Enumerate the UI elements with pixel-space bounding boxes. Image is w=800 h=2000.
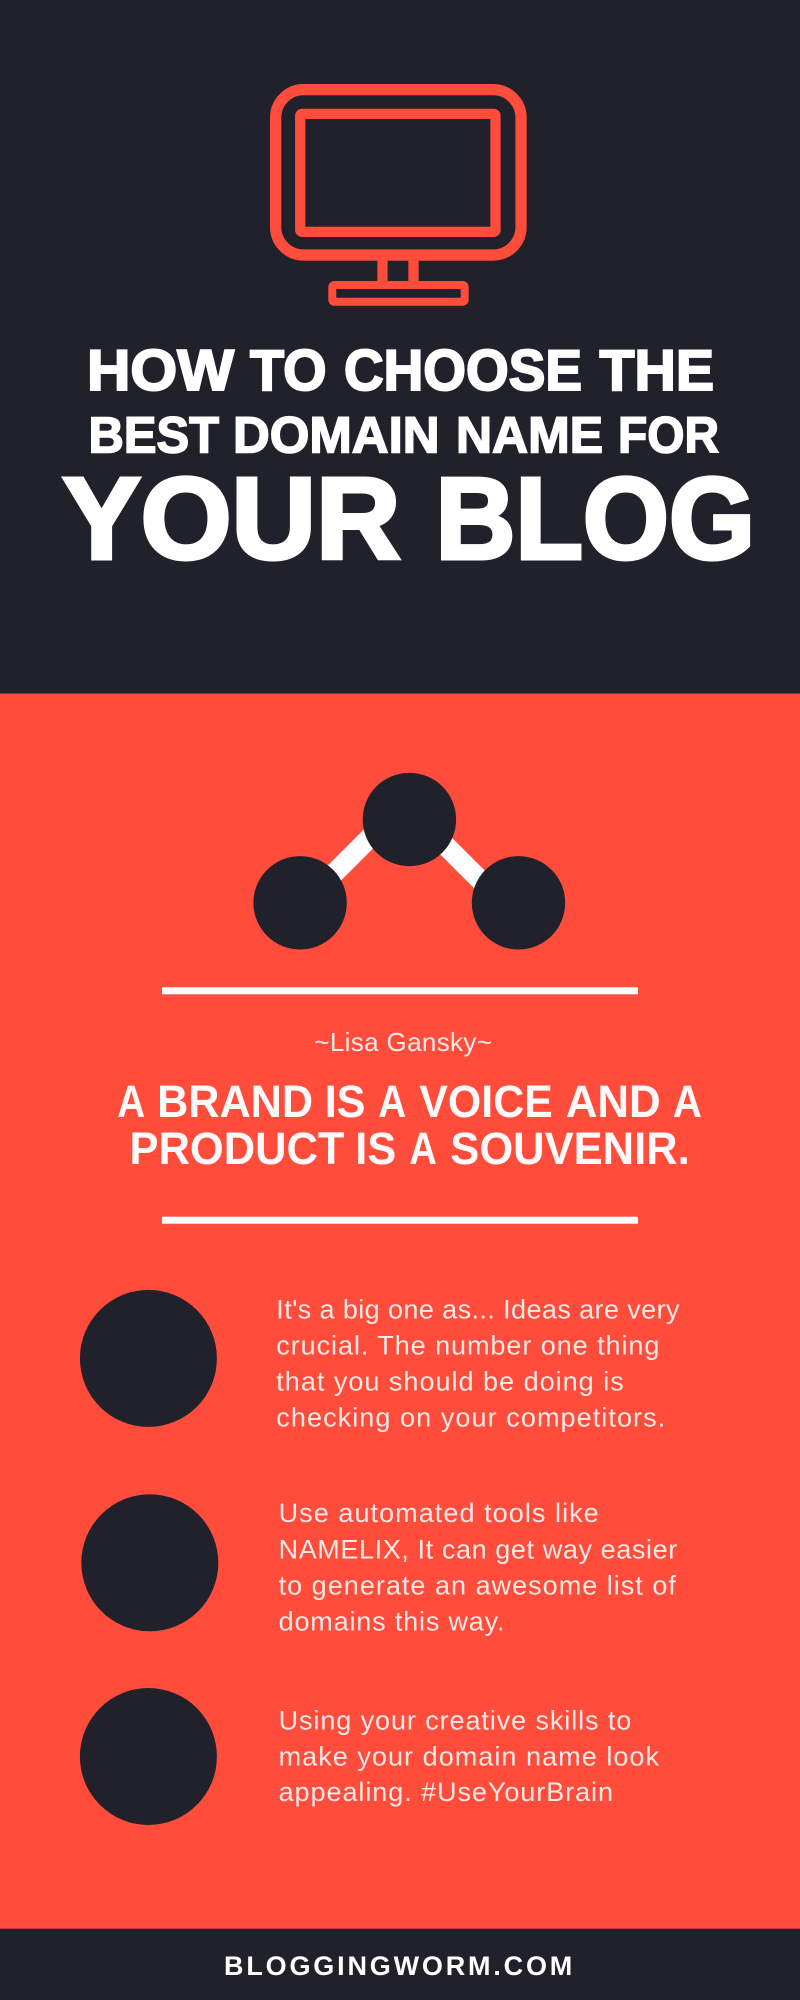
bullet circle 3 bbox=[80, 1688, 217, 1825]
quote line 1 bbox=[117, 1076, 702, 1127]
title line 1: TO bbox=[250, 339, 326, 403]
quote line 2: A bbox=[409, 1123, 437, 1174]
quote heading bbox=[117, 1076, 702, 1174]
bullet circle 2 bbox=[81, 1494, 218, 1631]
quote line 2: IS bbox=[355, 1123, 396, 1174]
item 1 text bbox=[276, 1294, 680, 1432]
panel: main red background bbox=[0, 694, 800, 1929]
quote attribution: ~Lisa Gansky~ bbox=[314, 1027, 492, 1057]
title line 1: HOW bbox=[87, 339, 235, 403]
title line 2 bbox=[88, 406, 719, 464]
title bbox=[63, 339, 755, 584]
panel: header background bbox=[0, 0, 800, 694]
list item 1 bbox=[80, 1290, 680, 1432]
item 2 text: domains this way. bbox=[279, 1606, 504, 1636]
quote line 1: AND bbox=[566, 1076, 661, 1127]
item 2 text: to generate an awesome list of bbox=[279, 1570, 676, 1600]
title line 1: CHOOSE bbox=[344, 339, 582, 403]
item 2 text: NAMELIX, It can get way easier bbox=[279, 1535, 677, 1565]
quote line 1: VOICE bbox=[419, 1076, 553, 1127]
bottom divider bbox=[162, 1217, 638, 1224]
item 3 text bbox=[279, 1706, 660, 1807]
quote line 1: A bbox=[378, 1076, 406, 1127]
quote line 2: PRODUCT bbox=[130, 1123, 344, 1174]
item 3 text: make your domain name look bbox=[279, 1741, 660, 1771]
quote line 1: A bbox=[673, 1076, 702, 1127]
list item 3 bbox=[80, 1688, 659, 1825]
icon: computer monitor bbox=[276, 90, 521, 302]
panel: footer background bbox=[0, 1929, 800, 2000]
quote line 1: BRAND bbox=[157, 1076, 313, 1127]
title line 2: BEST bbox=[88, 406, 219, 464]
title line 3: BLOG bbox=[436, 454, 755, 584]
title line 3: YOUR bbox=[63, 454, 400, 584]
item 3 text: Using your creative skills to bbox=[279, 1706, 631, 1736]
title line 2: FOR bbox=[618, 406, 719, 464]
item 3 text: appealing. #UseYourBrain bbox=[279, 1777, 613, 1807]
title line 2: DOMAIN bbox=[233, 406, 440, 464]
quote line 2: SOUVENIR. bbox=[450, 1123, 690, 1174]
quote line 1: IS bbox=[325, 1076, 366, 1127]
quote line 1: A bbox=[117, 1076, 145, 1127]
title line 2: NAME bbox=[456, 406, 603, 464]
icon: three connected circles bbox=[253, 773, 565, 950]
title line 3 bbox=[63, 454, 755, 584]
quote line 2 bbox=[130, 1123, 690, 1174]
bullet circle 1 bbox=[80, 1290, 217, 1427]
title line 1 bbox=[87, 339, 714, 403]
item 2 text bbox=[279, 1498, 677, 1636]
top divider bbox=[162, 987, 638, 994]
title line 1: THE bbox=[600, 339, 714, 403]
item 1 text: checking on your competitors. bbox=[276, 1402, 665, 1432]
footer text: BLOGGINGWORM.COM bbox=[224, 1951, 572, 1981]
item 2 text: Use automated tools like bbox=[279, 1498, 599, 1528]
item 1 text: It's a big one as... Ideas are very bbox=[276, 1294, 680, 1324]
item 1 text: crucial. The number one thing bbox=[276, 1331, 659, 1361]
list item 2 bbox=[81, 1494, 677, 1636]
item 1 text: that you should be doing is bbox=[276, 1367, 624, 1397]
